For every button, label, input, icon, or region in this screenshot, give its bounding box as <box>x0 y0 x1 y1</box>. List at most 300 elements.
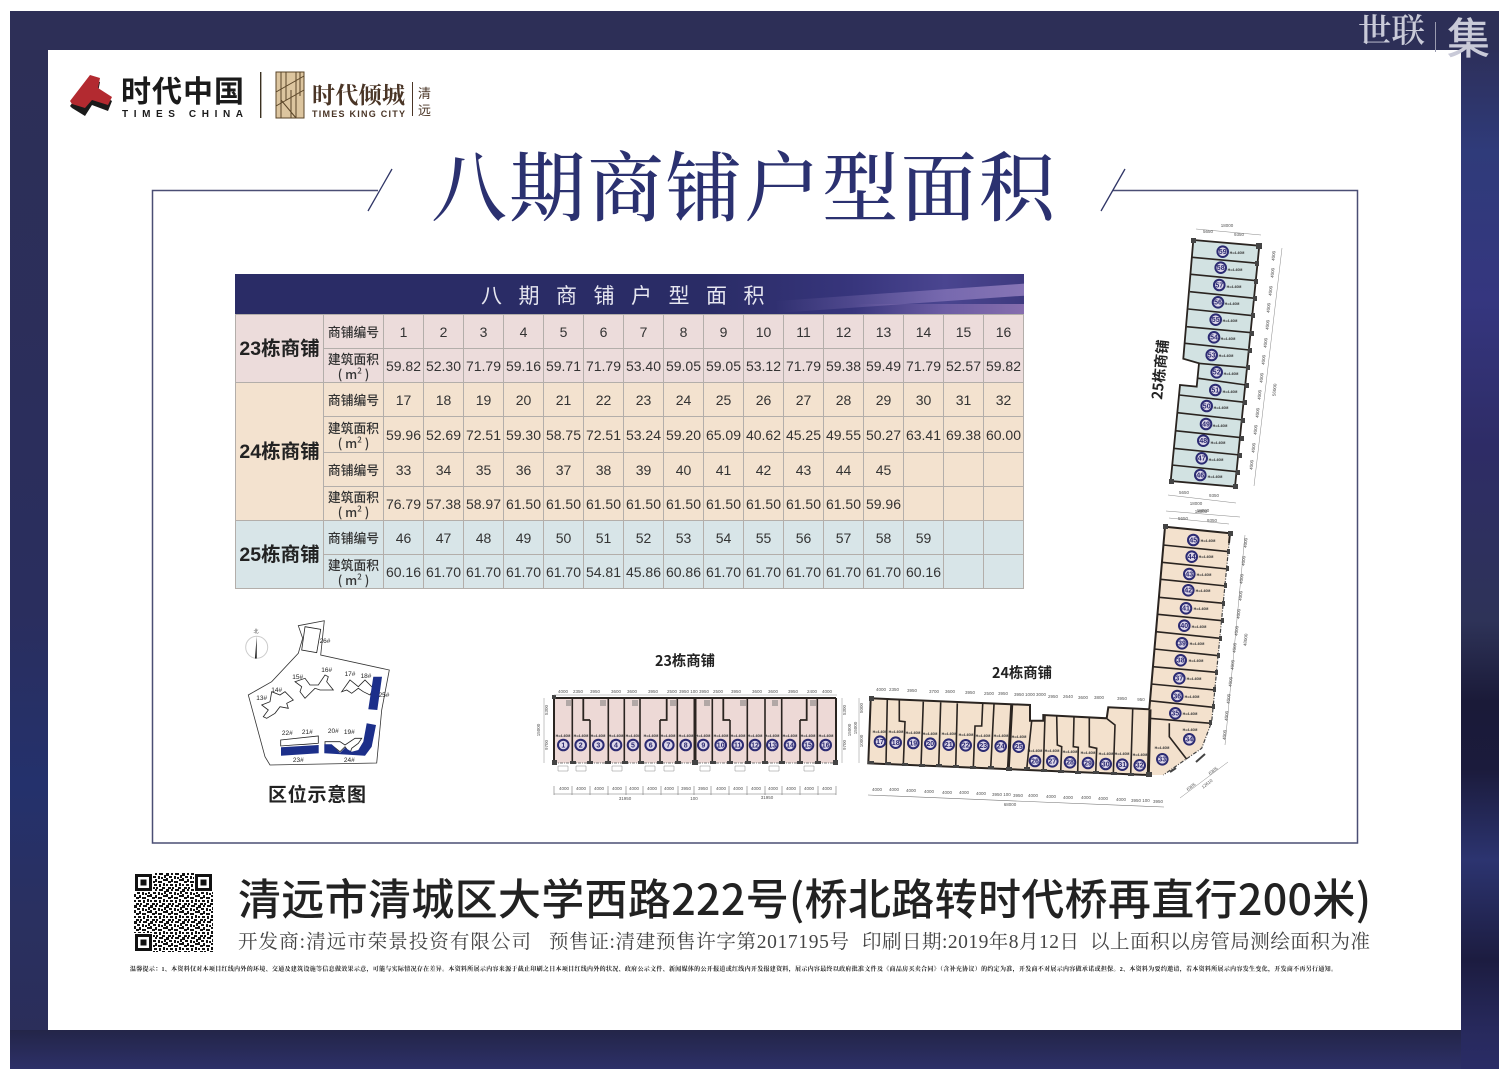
bottom dimensions: 4000 <box>629 786 640 791</box>
map caption: 区位示意图 <box>268 780 366 807</box>
location map <box>246 621 390 807</box>
building 24 rows: 60.00 <box>986 426 1021 442</box>
building 24 rows: 26 <box>756 392 771 408</box>
shop number markers 17-45: 42 <box>1184 588 1192 595</box>
logo wordmark: 时代中国: 时代中国 <box>121 67 244 111</box>
shop height notes: H=4.40M <box>906 731 920 735</box>
bottom dimensions: 4000 <box>594 786 605 791</box>
dimensions: 5650 <box>1203 229 1214 234</box>
shop height notes: H=4.40M <box>1227 285 1241 289</box>
shop dividers south wing <box>886 699 1133 774</box>
shop height notes: H=4.40M <box>873 730 887 734</box>
shop dividers <box>1172 257 1258 472</box>
building 24 rows: 43 <box>796 462 811 478</box>
building 23 rows: 59.82 <box>986 358 1021 374</box>
building 24 rows: 38 <box>596 462 611 478</box>
bottom dimensions: 4000 <box>559 786 570 791</box>
building 24 rows: 61.50 <box>746 496 781 512</box>
east wing dimensions: 4000 <box>1228 676 1233 687</box>
top dimensions: 4000 <box>822 689 833 694</box>
shop height notes: H=4.40M <box>1045 749 1059 753</box>
floor plan: building 24 <box>853 508 1249 807</box>
shop height notes: H=4.40M <box>661 734 675 738</box>
shop height notes: H=4.40M <box>976 734 990 738</box>
columns <box>868 524 1233 777</box>
map labels: 17# <box>345 671 356 678</box>
shop number markers 17-45: 40 <box>1180 623 1188 630</box>
shop number markers 46-59: 49 <box>1202 421 1210 428</box>
shop dividers east wing <box>1149 545 1229 759</box>
shop number markers 1-16 <box>558 740 831 750</box>
dimensions <box>1166 223 1282 517</box>
building 24 rows: 59.96 <box>866 496 901 512</box>
side dimensions: 15000 <box>847 723 852 736</box>
dimensions: 4000 <box>1261 354 1266 365</box>
bottom dimensions: 3950 <box>992 792 1003 797</box>
top dimensions: 2640 <box>1063 694 1074 699</box>
floor plan: building 25 <box>1146 223 1282 517</box>
shop height notes <box>873 539 1215 757</box>
building 24 rows: 商铺编号 <box>328 460 379 479</box>
logo wordmark: TIMES KING CITY: TIMES KING CITY <box>312 109 405 119</box>
shop number markers 46-59: 58 <box>1217 265 1225 272</box>
columns and outer units <box>552 695 838 765</box>
building 24 rows: ( m2 ) <box>338 502 369 520</box>
bottom dimensions: 4000 <box>716 786 727 791</box>
top dimensions: 3950 <box>907 688 918 693</box>
building 25 rows: 48 <box>476 530 491 546</box>
area table <box>235 314 1024 589</box>
building 24 rows: 59.96 <box>386 426 421 442</box>
building 24 rows: 59.30 <box>506 426 541 442</box>
east wing dimensions: 12610 <box>1201 778 1214 790</box>
shop height notes: H=4.40M <box>783 734 797 738</box>
building 24 rows: 40 <box>676 462 691 478</box>
building 23 rows: 4 <box>520 324 527 340</box>
building 25 rows: 45.86 <box>626 564 661 580</box>
building 24 rows: 61.50 <box>506 496 541 512</box>
shop number markers 1-16: 16 <box>822 742 830 749</box>
shop number markers 1-16: 8 <box>684 742 688 749</box>
shop height notes: H=4.40M <box>1221 337 1235 341</box>
building 23 rows: 12 <box>836 324 851 340</box>
building 23 rows: 8 <box>680 324 687 340</box>
bottom dimensions: 3950 <box>1153 799 1164 804</box>
map labels <box>256 638 390 764</box>
top dimensions: 2400 <box>807 689 818 694</box>
watermark: 世联 集 <box>1358 5 1490 67</box>
building 24 rows: 45 <box>876 462 891 478</box>
bottom dimensions: 4000 <box>733 786 744 791</box>
bottom dimensions: 4000 <box>889 787 900 792</box>
top dimensions: 3700 <box>929 689 940 694</box>
building 25 rows: 25栋商铺 <box>239 544 320 566</box>
shop number markers 46-59: 50 <box>1203 403 1211 410</box>
building 23 rows: 59.49 <box>866 358 901 374</box>
building 25 rows: 建筑面积 <box>328 554 379 574</box>
shop number markers 1-16: 9 <box>701 742 705 749</box>
bottom dimensions <box>554 786 836 801</box>
building 24 rows: 58.97 <box>466 496 501 512</box>
east wing dimensions: 4000 <box>1243 537 1248 548</box>
shop number markers 17-45: 26 <box>1031 758 1039 765</box>
top dimensions: 1000 <box>1025 692 1036 697</box>
shop number markers 46-59: 54 <box>1210 335 1218 342</box>
top dimensions: 3950 <box>648 689 659 694</box>
building 24 rows: 53.24 <box>626 426 661 442</box>
shop height notes: H=4.40M <box>1081 751 1095 755</box>
building 25 rows: 46 <box>396 530 411 546</box>
east wing dimensions <box>1169 508 1249 798</box>
dimensions: 9350 <box>1209 493 1220 498</box>
building 24 rows: 37 <box>556 462 571 478</box>
top dimensions: 4000 <box>558 689 569 694</box>
shop number markers 17-45: 33 <box>1158 757 1166 764</box>
highlighted shop blocks <box>281 677 382 756</box>
shop height notes: H=4.40M <box>923 732 937 736</box>
building 25 rows: ( m2 ) <box>338 570 369 588</box>
dimensions: 9350 <box>1234 232 1245 237</box>
dimensions: 4000 <box>1249 459 1254 470</box>
building 24 rows: 32 <box>996 392 1011 408</box>
side dimensions: 5300 <box>544 704 549 715</box>
shop height notes: H=4.40M <box>1223 319 1237 323</box>
logo: 清远: 清 <box>418 83 431 102</box>
icon: red building mark <box>70 75 112 116</box>
shop number markers 1-16: 13 <box>768 742 776 749</box>
building 24 rows: 41 <box>716 462 731 478</box>
building 23 rows: 59.05 <box>666 358 701 374</box>
building 24 rows: 22 <box>596 392 611 408</box>
dimensions: 18000 <box>1221 223 1234 228</box>
building 23 rows: 59.05 <box>706 358 741 374</box>
building 24 rows: 63.41 <box>906 426 941 442</box>
shop number markers 46-59: 46 <box>1196 472 1204 479</box>
building 25 rows: 61.70 <box>826 564 861 580</box>
shop height notes: H=4.40M <box>1133 753 1147 757</box>
building 24 rows: 21 <box>556 392 571 408</box>
map labels: 14# <box>271 687 283 694</box>
shop height notes: H=4.40M <box>1183 712 1197 716</box>
shop height notes: H=4.40M <box>1012 735 1026 739</box>
shop number markers 46-59: 57 <box>1215 282 1223 289</box>
top dimensions: 3950 <box>788 689 799 694</box>
shop number markers 17-45: 45 <box>1189 537 1197 544</box>
shop number markers 17-45: 35 <box>1171 711 1179 718</box>
shop height notes: H=4.40M <box>942 732 956 736</box>
bottom dimensions: 4000 <box>768 786 779 791</box>
bottom dimensions: 4000 <box>804 786 815 791</box>
logo: 清远 <box>418 83 431 119</box>
shop number markers 46-59: 51 <box>1211 387 1219 394</box>
shop height notes: H=4.40M <box>1199 555 1213 559</box>
shop number markers 17-45: 24 <box>997 744 1005 751</box>
top dimensions: 3600 <box>752 689 763 694</box>
logo wordmark: TIMES CHINA: TIMES CHINA <box>122 109 243 120</box>
shop number markers 17-45: 20 <box>926 741 934 748</box>
building 24 rows: 61.50 <box>666 496 701 512</box>
shop height notes: H=4.40M <box>1230 251 1244 255</box>
shop number markers 1-16: 2 <box>579 742 583 749</box>
building 24 rows: 59.20 <box>666 426 701 442</box>
building 24 rows: 24 <box>676 392 691 408</box>
shop number markers 46-59: 59 <box>1219 249 1227 256</box>
building 23 rows: 10 <box>756 324 771 340</box>
shop number markers 1-16: 4 <box>614 742 618 749</box>
shop number markers 46-59: 48 <box>1199 438 1207 445</box>
dimensions: 4000 <box>1255 407 1260 418</box>
bottom dimensions: 4000 <box>924 789 935 794</box>
shop number markers 46-59 <box>1195 246 1228 480</box>
shop height notes: H=4.40M <box>1196 589 1210 593</box>
shop number markers 1-16: 14 <box>786 742 794 749</box>
top dimensions: 3950 <box>1014 692 1025 697</box>
shop number markers 17-45: 32 <box>1136 763 1144 770</box>
top dimensions <box>554 689 837 695</box>
top dimensions: 3600 <box>1078 695 1089 700</box>
building 23 rows: 7 <box>640 324 647 340</box>
building 24 rows: 45.25 <box>786 426 821 442</box>
shop height notes <box>1208 251 1244 479</box>
shop height notes: H=4.40M <box>574 734 588 738</box>
bottom dimensions: 100 <box>1142 798 1150 803</box>
shop height notes: H=4.40M <box>1219 354 1233 358</box>
shop number markers 17-45: 41 <box>1182 606 1190 613</box>
building 25 rows: 61.70 <box>426 564 461 580</box>
shop number markers 17-45: 36 <box>1173 693 1181 700</box>
side dimensions <box>853 698 864 763</box>
building 24 rows: 49.55 <box>826 426 861 442</box>
QR code <box>134 873 213 952</box>
building 24 rows: 39 <box>636 462 651 478</box>
building 25 rows: 61.70 <box>866 564 901 580</box>
building 23 rows: 11 <box>796 324 811 340</box>
building 23 rows: 71.79 <box>786 358 821 374</box>
shop height notes: H=4.40M <box>1189 659 1203 663</box>
east wing dimensions: 4000 <box>1239 573 1244 584</box>
columns <box>1169 238 1262 489</box>
building 25 rows: 61.70 <box>506 564 541 580</box>
top dimensions: 3600 <box>945 689 956 694</box>
compass <box>246 628 268 658</box>
bottom dimensions: 4000 <box>576 786 587 791</box>
building 23 rows: 71.79 <box>906 358 941 374</box>
building 23 rows: 16 <box>996 324 1011 340</box>
shop height notes: H=4.40M <box>1183 728 1197 732</box>
building 25 rows: 61.70 <box>746 564 781 580</box>
building 24 rows: 24栋商铺 <box>239 441 320 463</box>
plan body: south wing <box>868 698 1150 775</box>
bottom dimensions: 4000 <box>647 786 658 791</box>
building 24 rows: 23 <box>636 392 651 408</box>
shop height notes: H=4.40M <box>994 734 1008 738</box>
east wing dimensions: 4000 <box>1236 608 1241 619</box>
building 24 rows: ( m2 ) <box>338 432 369 452</box>
top dimensions: 3950 <box>998 691 1009 696</box>
shop number markers 17-45: 17 <box>876 739 884 746</box>
shop number markers 46-59: 55 <box>1212 317 1220 324</box>
bottom dimensions: 31950 <box>619 796 632 801</box>
title: 八期商铺户型面积 <box>431 148 1058 232</box>
bottom dimensions: 4000 <box>1028 793 1039 798</box>
plan body: east wing <box>1149 527 1230 775</box>
shop number markers 46-59: 47 <box>1198 456 1206 463</box>
east wing dimensions: 4000 <box>1238 590 1243 601</box>
building 23 rows: 6 <box>600 324 607 340</box>
dimensions: 4000 <box>1259 372 1264 383</box>
shop number markers 17-45 <box>875 535 1199 771</box>
east wing dimensions: 5650 <box>1178 516 1189 521</box>
dimensions: 4000 <box>1270 267 1275 278</box>
bottom dimensions: 4000 <box>976 791 987 796</box>
building 24 rows: 18 <box>436 392 451 408</box>
building 23 rows: 23栋商铺 <box>239 338 320 360</box>
side dimensions: 5000 <box>859 702 864 713</box>
east wing dimensions: 4000 <box>1232 642 1237 653</box>
site outline <box>248 621 389 765</box>
top dimensions: 2500 <box>713 689 724 694</box>
building 23 rows: 59.82 <box>386 358 421 374</box>
building 24 rows: 建筑面积 <box>328 486 379 506</box>
top dimensions: 2500 <box>667 689 678 694</box>
building 24 rows: 33 <box>396 462 411 478</box>
shop number markers 1-16: 6 <box>649 742 653 749</box>
building 25 rows: 61.70 <box>546 564 581 580</box>
dimensions: 4000 <box>1266 302 1271 313</box>
building 24 rows: 61.50 <box>706 496 741 512</box>
top dimensions: 4000 <box>876 687 887 692</box>
dimensions: 4000 <box>1271 250 1276 261</box>
shop number markers 17-45: 31 <box>1118 762 1126 769</box>
shop number markers 17-45: 23 <box>979 743 987 750</box>
building 24 rows: 76.79 <box>386 496 421 512</box>
shop height notes: H=4.40M <box>1028 749 1042 753</box>
logo: Times China <box>70 67 431 120</box>
shop height notes: H=4.40M <box>731 734 745 738</box>
bottom dimensions: 4000 <box>1098 796 1109 801</box>
shop number markers 17-45: 29 <box>1084 760 1092 767</box>
shop number markers 17-45: 34 <box>1185 737 1193 744</box>
top dimensions: 2950 <box>1048 694 1059 699</box>
map labels: 16# <box>321 667 333 674</box>
bottom dimensions: 4000 <box>1046 794 1057 799</box>
map labels: 15# <box>292 674 304 681</box>
shop height notes: H=4.40M <box>1213 424 1227 428</box>
shop number markers 17-45: 27 <box>1048 759 1056 766</box>
building 25 rows: 47 <box>436 530 451 546</box>
shop height notes: H=4.40M <box>714 734 728 738</box>
bottom dimensions: 3950 <box>1013 793 1024 798</box>
building 23 rows: 52.30 <box>426 358 461 374</box>
dimensions: 56000 <box>1271 383 1278 396</box>
building 25 rows: 商铺编号 <box>328 528 379 547</box>
shop number markers 1-16: 12 <box>751 742 759 749</box>
shop number markers 1-16: 11 <box>734 742 742 749</box>
building 24 rows: 65.09 <box>706 426 741 442</box>
building 23 rows: 59.71 <box>546 358 581 374</box>
building 24 rows: 27 <box>796 392 811 408</box>
dimensions: 4000 <box>1251 442 1256 453</box>
dimensions: 4000 <box>1257 389 1262 400</box>
building 25 rows: 52 <box>636 530 651 546</box>
building 23 rows: 14 <box>916 324 931 340</box>
building 25 rows <box>236 521 1023 588</box>
shop height notes: H=4.40M <box>748 734 762 738</box>
building 24 rows: 35 <box>476 462 491 478</box>
shop height notes: H=4.40M <box>1214 406 1228 410</box>
project information line: 预售证:清建预售许字第2017195号 <box>549 931 849 953</box>
shop number markers 46-59: 56 <box>1214 300 1222 307</box>
dimensions: 4000 <box>1265 319 1270 330</box>
building 25 rows: 60.16 <box>906 564 941 580</box>
plan body <box>554 698 836 763</box>
table header band: 八期商铺户型面积 <box>481 280 781 310</box>
bottom dimensions <box>868 787 1164 807</box>
shop height notes: H=4.40M <box>1190 642 1204 646</box>
map labels: 13# <box>256 695 268 702</box>
shop height notes: H=4.40M <box>626 734 640 738</box>
building 24 rows: 36 <box>516 462 531 478</box>
shop number markers 17-45: 28 <box>1066 760 1074 767</box>
shop height notes: H=4.40M <box>1208 475 1222 479</box>
top dimensions: 3950 <box>699 689 710 694</box>
building 24 rows: 61.50 <box>626 496 661 512</box>
shop height notes: H=4.40M <box>1209 458 1223 462</box>
plan body <box>1171 240 1259 487</box>
building 24 rows: 30 <box>916 392 931 408</box>
shop height notes <box>556 734 833 738</box>
side dimensions: 9700 <box>842 739 847 750</box>
shop number markers 17-45: 43 <box>1185 571 1193 578</box>
shop number markers 46-59: 52 <box>1213 370 1221 377</box>
content frame <box>152 190 1358 843</box>
building 25 rows: 60.86 <box>666 564 701 580</box>
building 23 rows: 15 <box>956 324 971 340</box>
building 25 rows: 50 <box>556 530 571 546</box>
building 24 rows: 20 <box>516 392 531 408</box>
bottom dimensions: 4000 <box>872 787 883 792</box>
top dimensions: 3950 <box>731 689 742 694</box>
shop number markers 17-45: 37 <box>1175 676 1183 683</box>
shop height notes: H=4.40M <box>1211 441 1225 445</box>
top dimensions: 2500 <box>984 691 995 696</box>
shop height notes: H=4.40M <box>1155 746 1169 750</box>
east wing dimensions: 4000 <box>1241 555 1246 566</box>
map labels: 18# <box>361 673 372 680</box>
shop height notes: H=4.40M <box>765 734 779 738</box>
building 23 rows: 2 <box>440 324 447 340</box>
bottom dimensions: 4000 <box>786 786 797 791</box>
top dimensions: 3600 <box>768 689 779 694</box>
map labels: 20# <box>328 728 339 735</box>
top dimensions: 2350 <box>889 687 900 692</box>
top dimensions: 3800 <box>1094 695 1105 700</box>
project information line: 以上面积以房管局测绘面积为准 <box>1090 931 1370 953</box>
map labels: 25# <box>379 692 390 699</box>
side dimensions: 5300 <box>842 704 847 715</box>
top dimensions: 3000 <box>1036 692 1047 697</box>
shop number markers 17-45: 25 <box>1015 744 1023 751</box>
bottom dimensions: 4000 <box>612 786 623 791</box>
bottom dimensions: 3950 <box>681 786 692 791</box>
side dimensions: 15000 <box>853 721 858 734</box>
shop height notes: H=4.40M <box>1223 390 1237 394</box>
shop height notes: H=4.40M <box>889 730 903 734</box>
building 24 rows: 42 <box>756 462 771 478</box>
building 23 rows: 52.57 <box>946 358 981 374</box>
bottom dimensions: 4000 <box>1116 797 1127 802</box>
building 24 rows: 25 <box>716 392 731 408</box>
